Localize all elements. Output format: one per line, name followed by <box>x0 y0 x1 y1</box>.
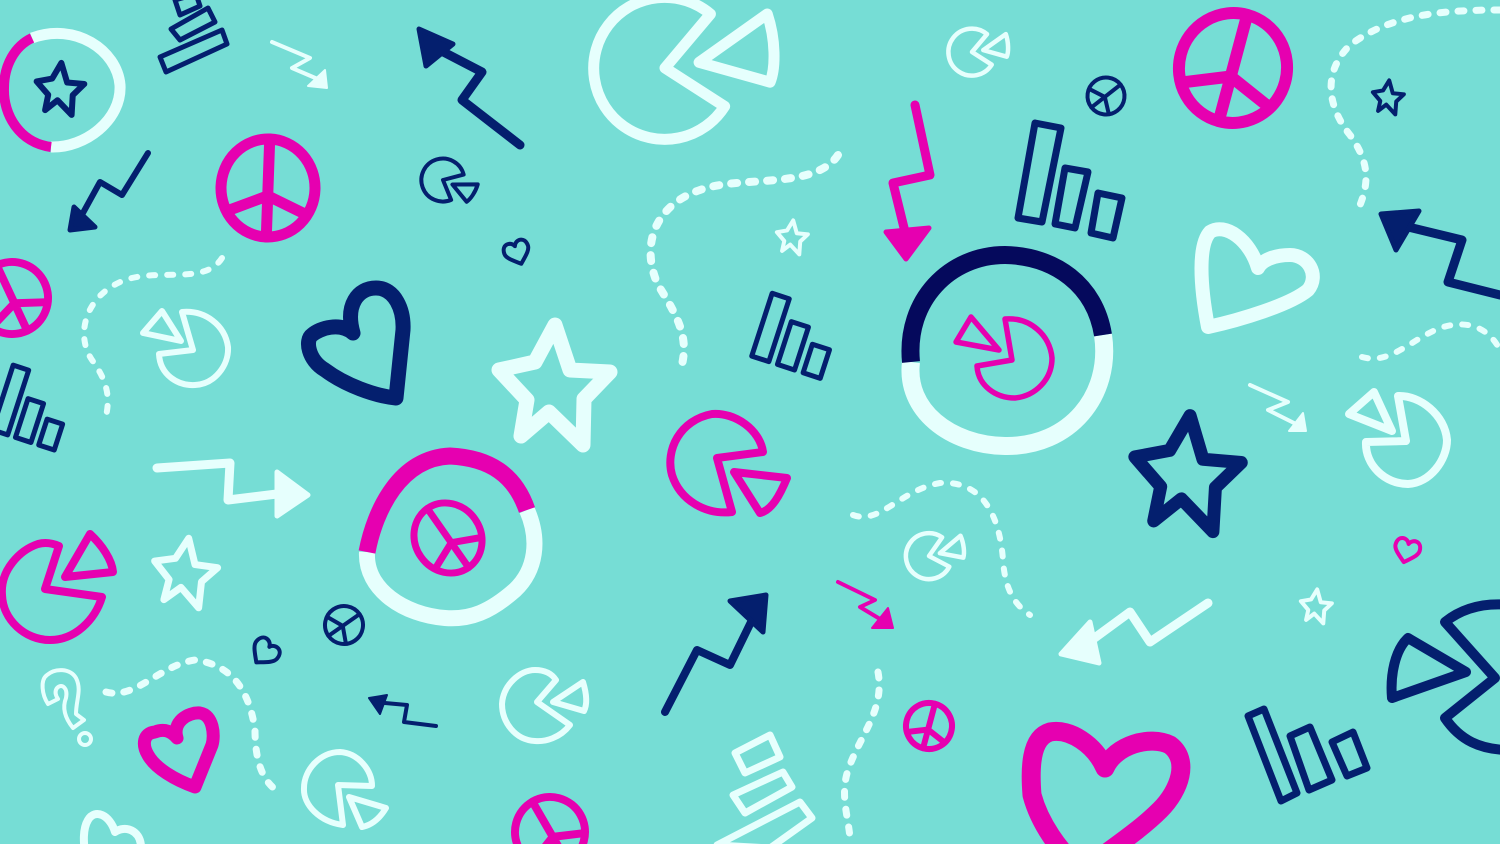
dashed line: top right <box>1331 10 1500 205</box>
dashed line: bottom centre <box>845 672 879 838</box>
icon: small navy peace left <box>318 599 370 651</box>
icon: small white pie centre <box>904 530 966 581</box>
arrow: white centre left <box>157 463 308 516</box>
icon: white pie right <box>1349 392 1447 484</box>
dashed line: centre <box>651 155 838 372</box>
icon: white pie bottom left <box>304 752 386 827</box>
dashed line: left <box>84 258 222 420</box>
icon: white heart bottom <box>84 814 141 844</box>
icon: white star left <box>151 535 220 609</box>
icon: navy bars top <box>160 0 227 72</box>
arrow: small pink <box>838 582 893 628</box>
arrow: white left <box>1061 603 1208 663</box>
arrow: small navy <box>369 695 436 726</box>
arrow: small white top <box>272 42 327 88</box>
icon: white pie bottom centre <box>502 670 586 741</box>
arrow: navy up <box>665 595 766 712</box>
icon: small navy peace <box>1080 70 1132 122</box>
icon: pink pie centre <box>670 414 787 513</box>
icon: pink peace bottom <box>502 784 598 844</box>
icon: white question mark <box>43 670 91 745</box>
dashed line: lower left <box>106 660 280 792</box>
icon: navy bars left edge <box>0 365 75 450</box>
icon: navy bars centre right <box>1018 123 1122 238</box>
icon: navy bars centre <box>752 293 841 378</box>
icon: small navy pie <box>413 150 482 217</box>
icon: small white star right <box>1300 589 1333 624</box>
ring with pink pie <box>910 255 1104 446</box>
icon: navy bars bottom right <box>1248 709 1367 801</box>
icon: navy heart <box>308 288 403 398</box>
arrow: pink down <box>886 105 930 259</box>
arrow: navy top <box>419 29 520 145</box>
icon: large white pie <box>594 0 774 139</box>
icon: navy pie right edge <box>1392 604 1500 750</box>
icon: pink pie left edge <box>2 534 113 640</box>
icon: pink peace top right <box>1167 1 1299 135</box>
icon: small navy heart <box>502 238 533 268</box>
icon: small pink peace <box>901 698 957 754</box>
arrow: navy right edge <box>1381 211 1500 295</box>
ring with star, top left <box>4 33 120 147</box>
dashed line: right <box>1362 324 1500 359</box>
icon: small navy star <box>1372 80 1405 115</box>
icon: pink peace left edge <box>0 250 60 346</box>
icon: small white pie top <box>948 29 1008 76</box>
arrow: navy left <box>70 153 148 230</box>
icon: large white star <box>499 325 610 445</box>
icon: large pink heart <box>1031 731 1181 844</box>
icon: pink peace left <box>219 137 317 239</box>
icon: small white star centre <box>776 220 809 255</box>
arrow: small white right <box>1250 385 1306 431</box>
icon: white bars bottom <box>717 735 812 844</box>
icon: white pie left <box>143 311 228 385</box>
ring with pink peace <box>367 456 534 618</box>
icon: small pink heart <box>1392 537 1422 565</box>
icon: pink heart lower left <box>144 713 213 787</box>
icon: navy star <box>1132 414 1243 533</box>
icon: white heart right <box>1202 229 1313 327</box>
icon: small navy heart lower <box>246 635 283 671</box>
dashed line: centre right <box>853 483 1030 615</box>
